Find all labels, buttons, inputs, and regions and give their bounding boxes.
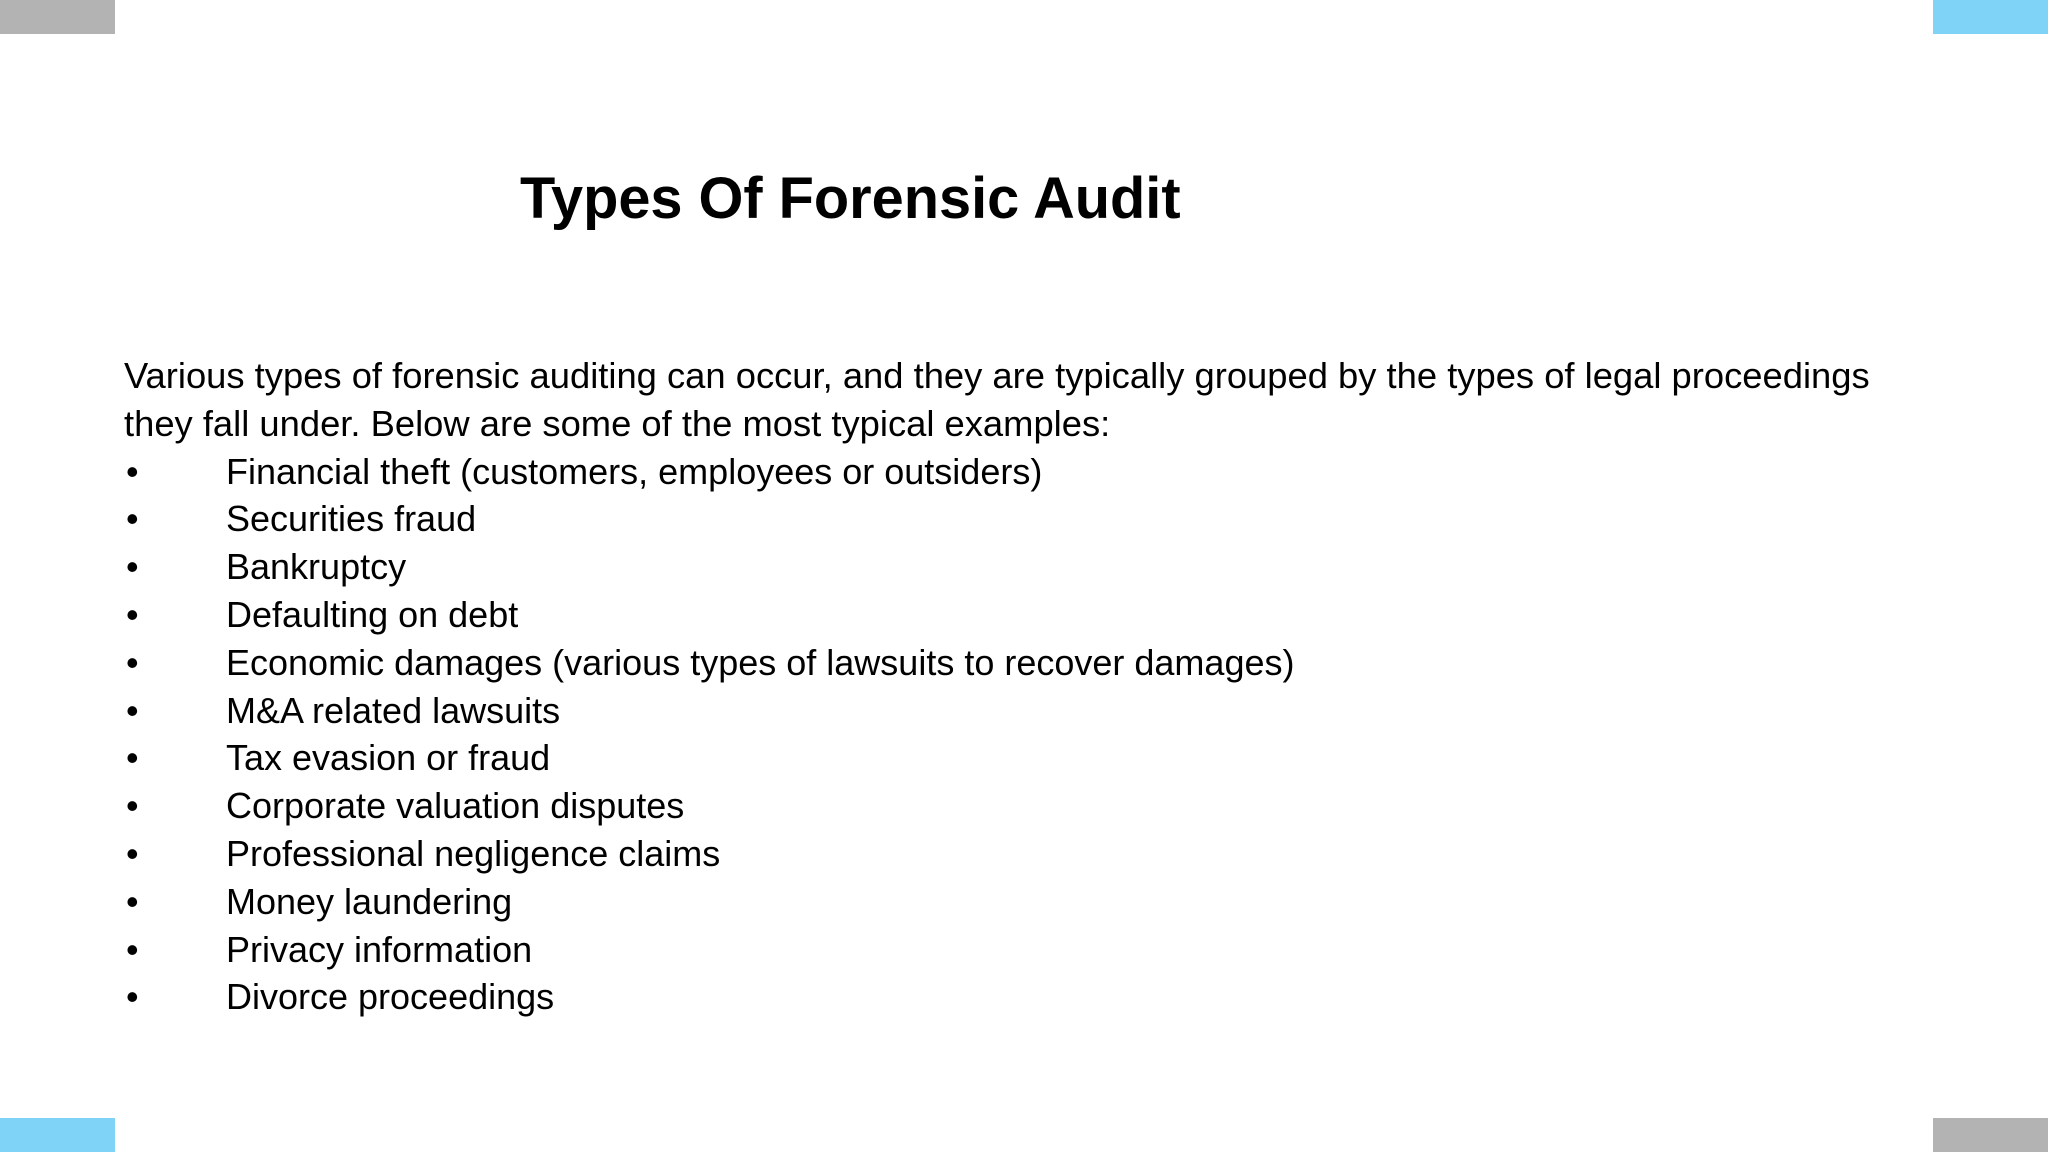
bullet list: Corporate valuation disputes [226, 785, 684, 826]
bullet list: • [126, 498, 139, 539]
bullet list: Economic damages (various types of lawsuits to recover damages) [226, 642, 1294, 683]
bullet list [126, 451, 1294, 1017]
corner: top-left gray [0, 0, 115, 34]
bullet list: Privacy information [226, 929, 532, 970]
bullet list: Defaulting on debt [226, 594, 518, 635]
bullet list: • [126, 833, 139, 874]
bullet list: • [126, 690, 139, 731]
bullet list: Divorce proceedings [226, 976, 554, 1017]
bullet list: • [126, 546, 139, 587]
bullet list: • [126, 881, 139, 922]
bullet list: • [126, 642, 139, 683]
bullet list: Money laundering [226, 881, 512, 922]
bullet list: • [126, 976, 139, 1017]
bullet list: Financial theft (customers, employees or outsiders) [226, 451, 1042, 492]
intro paragraph: Various types of forensic auditing can occur, and they are typically grouped by the types of legal proceedings [124, 355, 1870, 396]
bullet list: Tax evasion or fraud [226, 737, 550, 778]
intro paragraph: they fall under. Below are some of the most typical examples: [124, 403, 1110, 444]
bullet list: Professional negligence claims [226, 833, 720, 874]
corner: top-right cyan [1933, 0, 2048, 34]
bullet list: M&A related lawsuits [226, 690, 560, 731]
bullet list: Bankruptcy [226, 546, 406, 587]
bullet list: • [126, 785, 139, 826]
bullet list: Securities fraud [226, 498, 476, 539]
bullet list: • [126, 737, 139, 778]
body text [124, 355, 1870, 1017]
title: Types Of Forensic Audit [520, 166, 1181, 231]
bullet list: • [126, 594, 139, 635]
corner: bottom-right gray [1933, 1118, 2048, 1152]
bullet list: • [126, 929, 139, 970]
corner: bottom-left cyan [0, 1118, 115, 1152]
bullet list: • [126, 451, 139, 492]
intro paragraph [124, 355, 1870, 444]
